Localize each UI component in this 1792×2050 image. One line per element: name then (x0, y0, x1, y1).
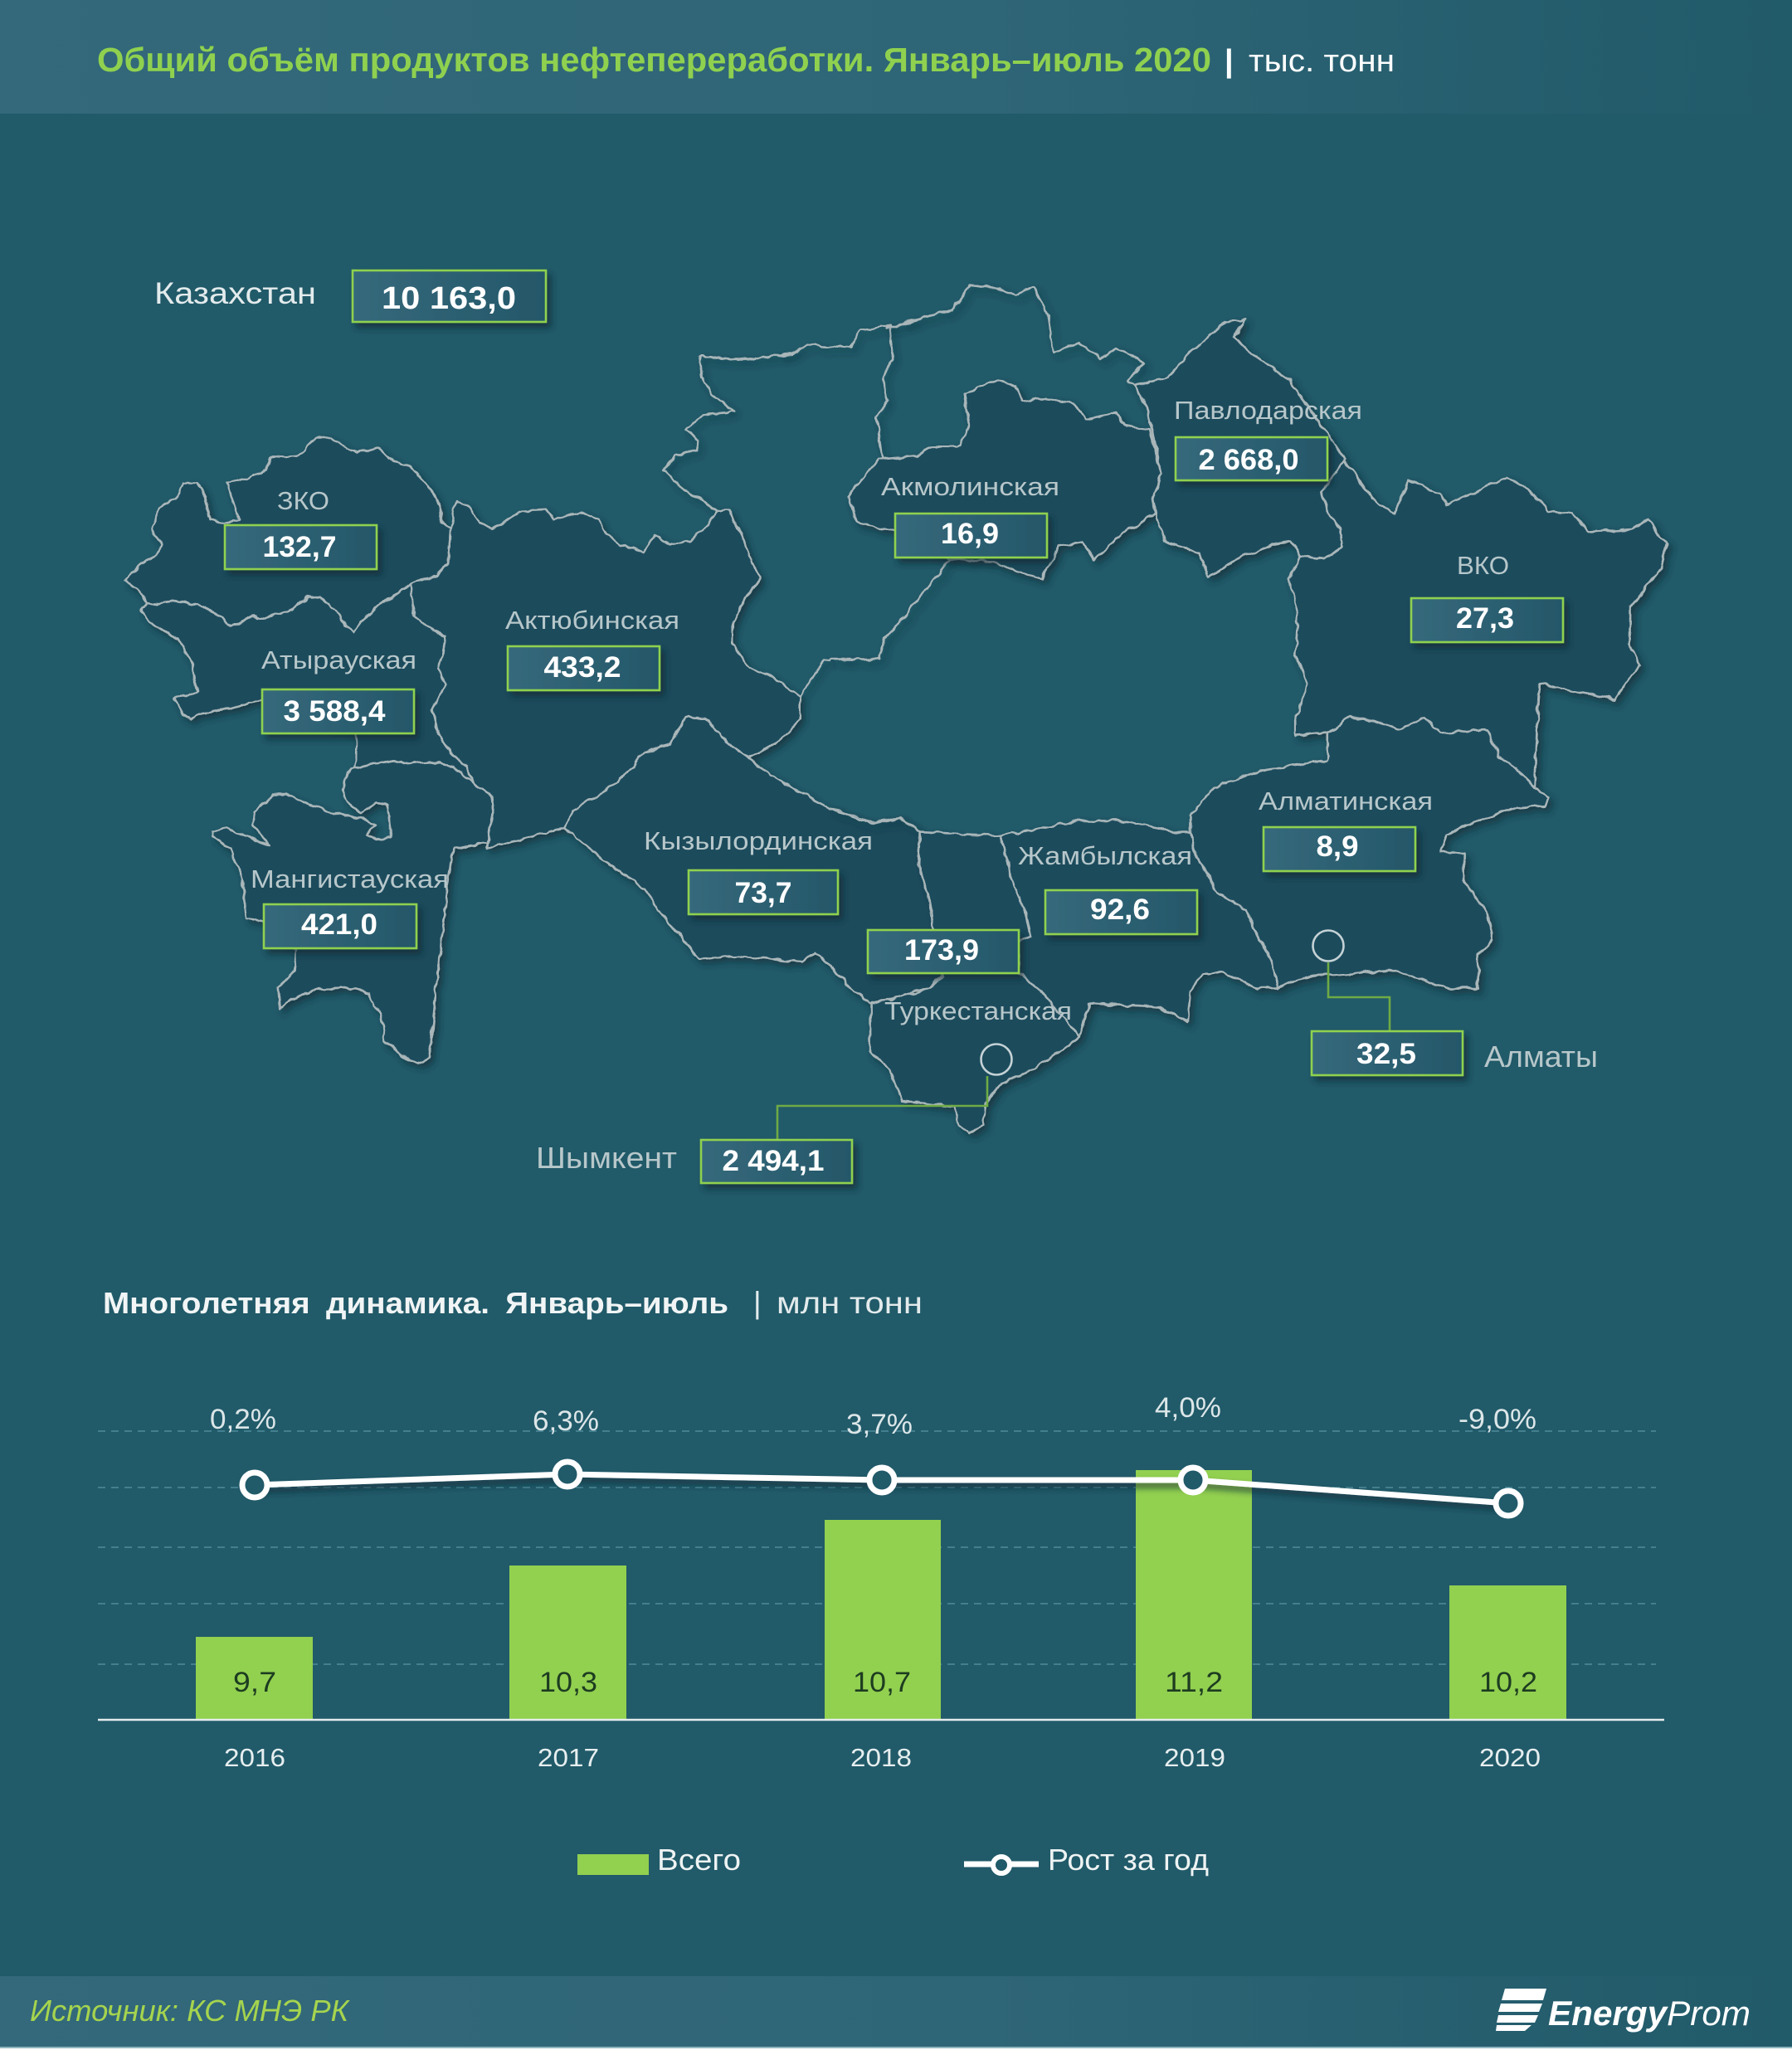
callout: Shymkent city (536, 1140, 852, 1183)
legend: total: Всего (657, 1843, 741, 1877)
callout: West Kazakhstan: 132,7 (262, 531, 337, 563)
bars (196, 1470, 1566, 1719)
year labels: 2018 (850, 1743, 912, 1772)
title: Общий объём продуктов нефтепереработки. Январь–июль 2020 (97, 41, 1211, 79)
logo: EnergyProm: EnergyProm (1548, 1994, 1751, 2033)
region: Almaty oblast (1191, 718, 1548, 988)
city marker: Shymkent (777, 1044, 1012, 1140)
Kazakhstan total (154, 270, 546, 322)
callout: Almaty oblast (1259, 786, 1433, 871)
callout: Shymkent city: 2 494,1 (722, 1145, 825, 1177)
callout: Akmola: 16,9 (941, 518, 999, 550)
city marker: Almaty (1312, 931, 1390, 1031)
callout: Almaty city: 32,5 (1356, 1038, 1416, 1070)
callout: Turkestan: Туркестанская (884, 996, 1072, 1025)
legend (577, 1843, 1209, 1877)
title unit: тыс. тонн (1249, 44, 1395, 79)
western regions (125, 324, 942, 1064)
source: Источник: КС МНЭ РК (30, 1994, 350, 2028)
legend: yearly growth (964, 1843, 1209, 1877)
callout: Kyzylorda (644, 826, 873, 914)
footer band (0, 1976, 1792, 2050)
growth labels: 3,7% (846, 1409, 913, 1440)
bar values: 9,7 (233, 1667, 276, 1698)
callout: Almaty oblast: 8,9 (1316, 830, 1359, 863)
eastern regions (830, 285, 1668, 1134)
callout: Kyzylorda: 73,7 (735, 877, 791, 909)
region: Atyrau (141, 583, 475, 784)
growth labels (210, 1392, 1536, 1440)
region: Turkestan (870, 832, 1080, 1134)
callout: Almaty city (1312, 1031, 1598, 1075)
title unit: | (1225, 44, 1234, 79)
legend: total (577, 1843, 741, 1877)
map of Kazakhstan (125, 285, 1668, 1134)
region: Pavlodar (1135, 319, 1345, 577)
region: Aktobe (411, 500, 800, 849)
callout: Akmola: Акмолинская (881, 472, 1059, 501)
callout: Pavlodar (1174, 396, 1362, 480)
region outline: Kostanay (664, 324, 893, 511)
callout: Aktobe: Актюбинская (505, 606, 679, 635)
chart heading: Многолетняя динамика. Январь–июль (103, 1286, 728, 1320)
callout: West Kazakhstan (225, 486, 377, 569)
region outline: Karaganda west border (800, 660, 830, 697)
region outline: Karaganda north border (830, 559, 949, 660)
callout: Aktobe (505, 606, 679, 690)
growth labels: 6,3% (533, 1405, 599, 1437)
region: West Kazakhstan (125, 438, 450, 632)
bar values: 10,7 (853, 1667, 911, 1698)
callout: Atyrau: 3 588,4 (284, 695, 386, 728)
region: Kyzylorda (564, 718, 942, 1003)
callout: Mangystau (251, 864, 449, 948)
chart unit: | (753, 1286, 762, 1320)
legend: yearly growth: Рост за год (1048, 1843, 1209, 1877)
combo chart (98, 1392, 1664, 1772)
growth labels: -9,0% (1458, 1404, 1536, 1435)
callout: Pavlodar: 2 668,0 (1198, 444, 1299, 476)
region: Jambyl (1001, 820, 1278, 1037)
growth labels: 4,0% (1155, 1392, 1221, 1424)
bar values (233, 1667, 1537, 1698)
callout: Kyzylorda: Кызылординская (644, 826, 873, 855)
callout: Aktobe: 433,2 (544, 651, 621, 684)
icon: logo stripes (1496, 1989, 1546, 2031)
region outline: Karaganda south border (830, 809, 920, 832)
callout: Almaty oblast: Алматинская (1259, 786, 1433, 816)
callout: Mangystau: 421,0 (301, 908, 377, 941)
region: Mangystau (212, 761, 493, 1064)
callout: Shymkent city: Шымкент (536, 1141, 677, 1175)
region: East Kazakhstan (1289, 459, 1668, 787)
callout: Turkestan (868, 930, 1072, 1025)
callout: Atyrau (261, 645, 416, 733)
callout: Pavlodar: Павлодарская (1174, 396, 1362, 425)
callout: Almaty city: Алматы (1484, 1040, 1598, 1074)
callout: Turkestan: 173,9 (904, 934, 979, 967)
callout: Jambyl (1018, 841, 1197, 934)
bar values: 10,3 (539, 1667, 597, 1698)
callout: East Kazakhstan: 27,3 (1456, 602, 1514, 635)
growth labels: 0,2% (210, 1404, 276, 1435)
region: Akmola (848, 380, 1161, 579)
callout: Jambyl: 92,6 (1090, 894, 1150, 926)
year labels: 2020 (1479, 1743, 1541, 1772)
callout: Akmola (881, 472, 1059, 558)
bar values: 10,2 (1479, 1667, 1537, 1698)
header band (0, 0, 1792, 114)
callout: Mangystau: Мангистауская (251, 864, 449, 894)
callout: East Kazakhstan (1411, 551, 1563, 642)
callout: West Kazakhstan: ЗКО (277, 486, 329, 515)
Kazakhstan total: Казахстан (154, 276, 316, 310)
region outline: North Kazakhstan (888, 285, 1144, 386)
callout: Atyrau: Атырауская (261, 645, 416, 674)
chart unit: млн тонн (777, 1286, 923, 1320)
callout: East Kazakhstan: ВКО (1457, 551, 1509, 580)
callout: Jambyl: Жамбылская (1018, 841, 1192, 870)
growth line (242, 1462, 1521, 1516)
year labels: 2017 (538, 1743, 599, 1772)
bar values: 11,2 (1165, 1667, 1223, 1698)
year labels: 2016 (224, 1743, 285, 1772)
year labels (224, 1743, 1541, 1772)
Kazakhstan total: 10 163,0 (382, 281, 516, 316)
year labels: 2019 (1164, 1743, 1225, 1772)
